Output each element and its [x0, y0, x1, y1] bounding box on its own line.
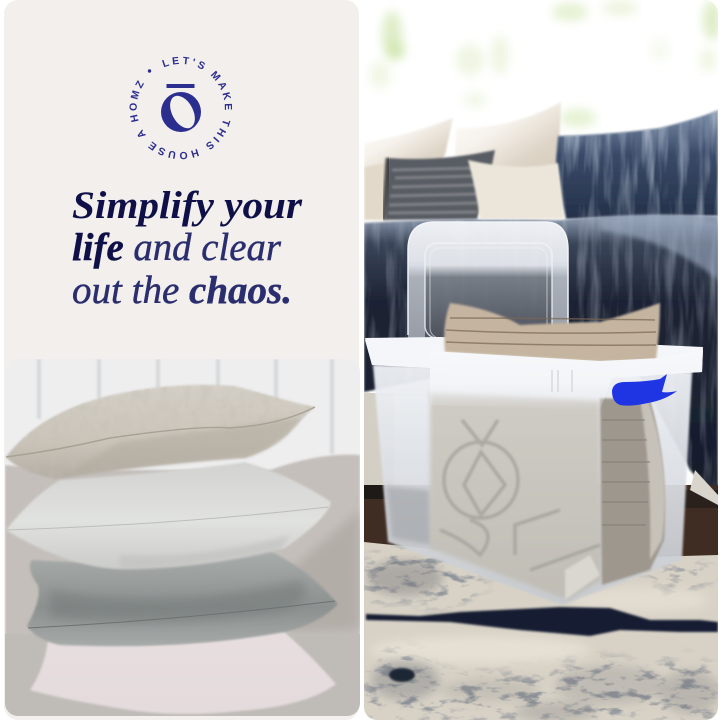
- photo: clear storage bin on rug: [364, 0, 720, 720]
- bin rim left edge: [365, 340, 435, 368]
- cushion: sand left: [364, 164, 388, 221]
- cushion: cream: [468, 160, 564, 219]
- sofa seat: [5, 634, 360, 716]
- wall panelling: [37, 359, 334, 454]
- pillow 2: pale grey: [6, 462, 331, 569]
- bin latch: [552, 370, 572, 392]
- lid behind the bin: [408, 222, 568, 345]
- logo letter o: [161, 92, 201, 132]
- blurred garden window: [369, 0, 720, 127]
- circular slogan: LET'S MAKE THIS HOUSE A HOMZ: [130, 56, 232, 160]
- logo macron bar: [166, 84, 194, 88]
- photo: stack of pillows: [5, 359, 360, 716]
- sofa throw: [364, 215, 718, 500]
- bin: [365, 303, 703, 605]
- wood floor: [364, 485, 718, 557]
- beige pleated pillow in the bin: [444, 303, 660, 362]
- pillow 3: slate grey: [27, 550, 338, 646]
- headline line 2: life and clear: [72, 226, 282, 269]
- logo badge: [130, 56, 232, 160]
- bin body: [373, 365, 692, 605]
- headline: [72, 184, 303, 312]
- panel: headline card: [4, 0, 359, 720]
- rug dark scratches: [364, 545, 720, 720]
- rug: [364, 542, 720, 720]
- logo dot: [148, 69, 151, 73]
- bin rim: [365, 337, 703, 376]
- back pillows, patterned: [364, 118, 453, 168]
- rug light patches: [376, 637, 584, 663]
- cushion: striped grey: [384, 150, 495, 220]
- navy velvet pillow: [556, 110, 718, 219]
- folded patterned pillow: [430, 392, 602, 600]
- bin rim front: [430, 350, 703, 410]
- sofa skirt: [364, 393, 384, 485]
- rug dark navy band: [366, 607, 718, 636]
- headline line 3: out the chaos.: [72, 269, 292, 312]
- headline line 1: Simplify your: [72, 184, 303, 227]
- grey sofa back: [5, 455, 360, 636]
- blue handle: [612, 374, 677, 406]
- pillow 1: natural linen: [6, 385, 315, 479]
- pillow 4: blush: [30, 630, 336, 714]
- rug grey washes: [367, 560, 720, 720]
- folded pleated pillow: [600, 398, 665, 585]
